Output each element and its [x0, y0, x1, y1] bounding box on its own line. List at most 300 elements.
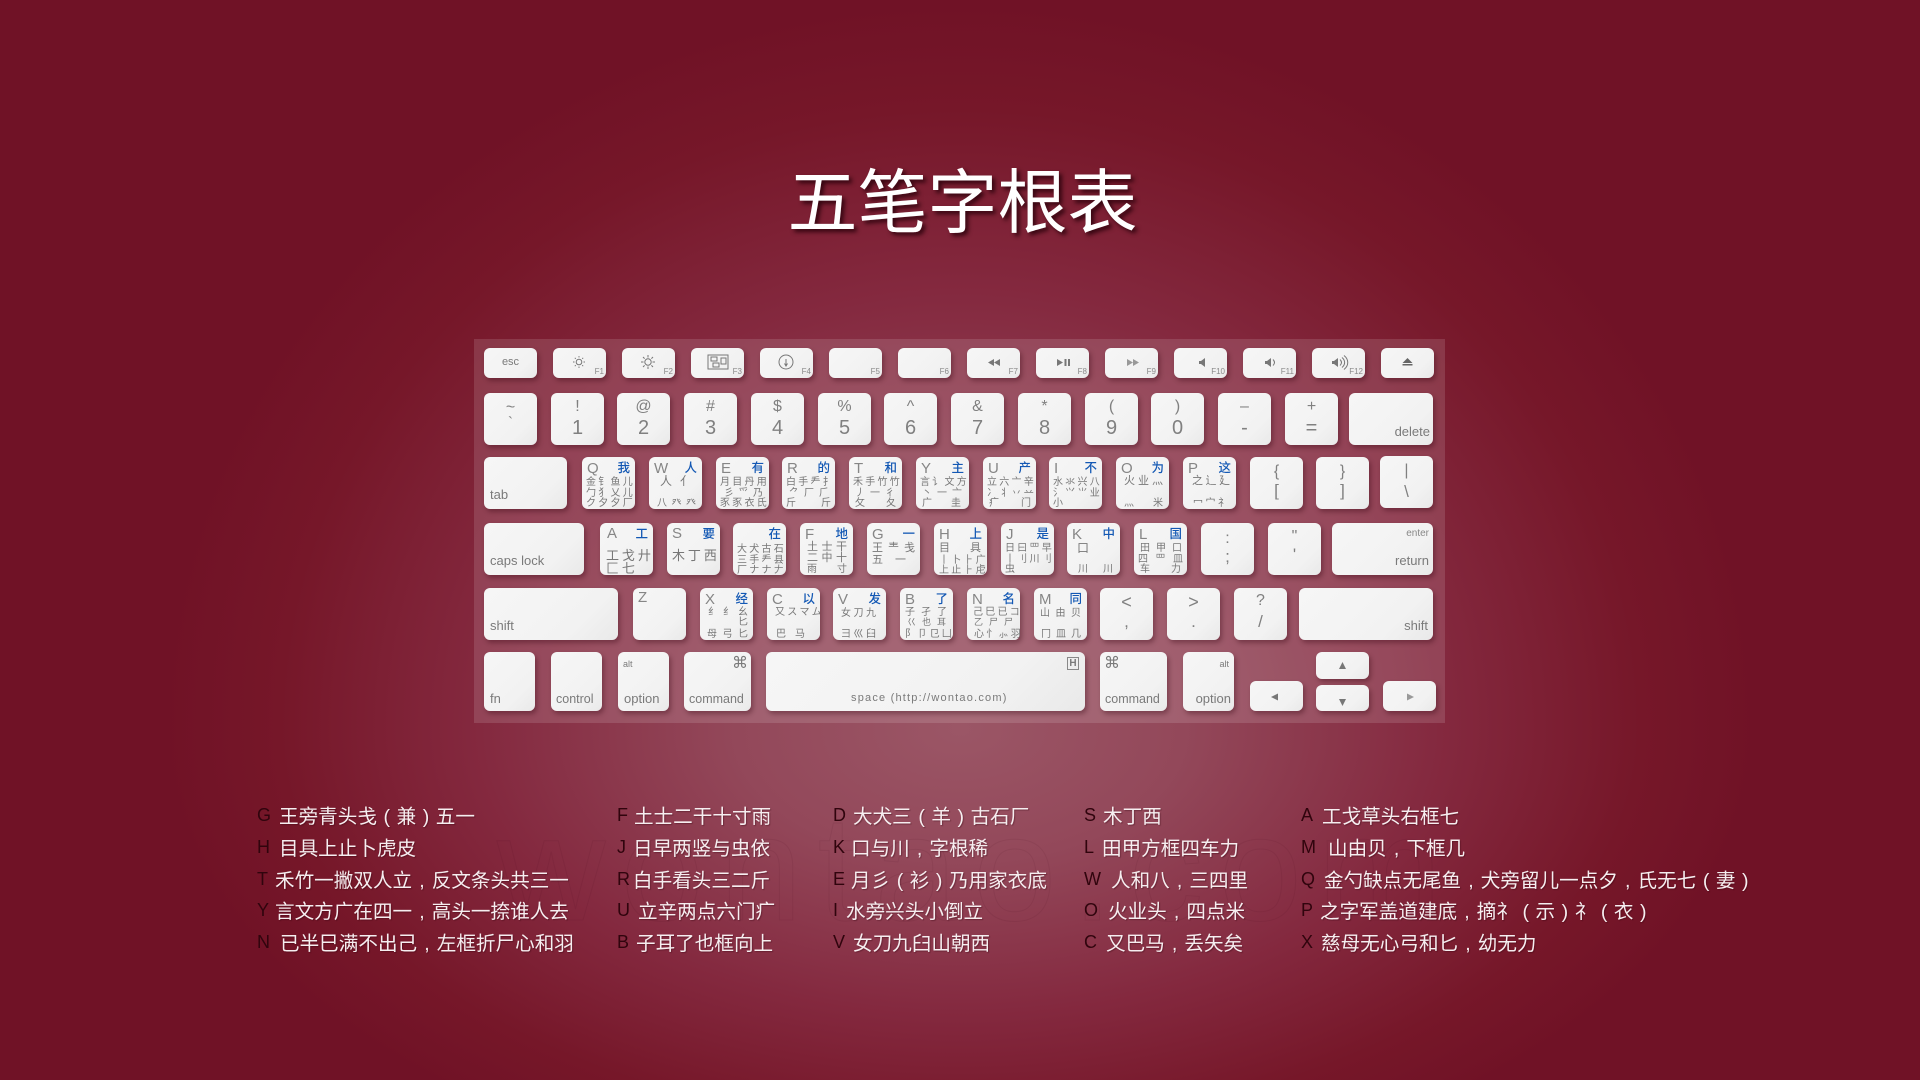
- key: space: H: [1069, 658, 1077, 669]
- key: 5: 5: [839, 417, 850, 439]
- legend text: S: 木丁西: [1103, 800, 1162, 829]
- key: comma: ,: [1124, 612, 1129, 631]
- key: F11 volume down: F11: [1281, 367, 1294, 376]
- key: W 人: 人 亻: [660, 472, 692, 489]
- key: H 上: [934, 523, 987, 575]
- key: F2 brightness up: F2: [664, 367, 673, 376]
- key: equals: +: [1307, 398, 1316, 415]
- key: J 是: 丨 刂 川 刂: [1005, 550, 1052, 565]
- key: V 发: 彐 巛 臼: [841, 625, 876, 640]
- key: O 为: 火 业 灬: [1124, 472, 1163, 488]
- key: 9: 9: [1106, 417, 1117, 439]
- legend letter: L: L: [1084, 837, 1094, 857]
- key: 3: [684, 393, 737, 445]
- key: N 名: 名: [1002, 588, 1015, 607]
- key: B 了: 阝 卩 ⺋ 凵: [905, 625, 952, 640]
- key: F9 forward: F9: [1147, 367, 1156, 376]
- key: T 和: T: [854, 460, 863, 477]
- key: U 产: [983, 457, 1036, 509]
- key: F8 play pause: [1036, 348, 1089, 378]
- legend text: Q: (: [1703, 870, 1709, 892]
- panel: keyboard: [474, 339, 1445, 723]
- key: period: .: [1191, 612, 1196, 631]
- key: F 地: [800, 523, 853, 575]
- key: L 国: 车 力: [1140, 560, 1181, 575]
- key: left command: ⌘: [732, 653, 748, 672]
- key: I 不: 水 氺 兴 八: [1053, 473, 1100, 488]
- legend letter: P: P: [1301, 900, 1313, 920]
- key: Y 主: Y: [921, 460, 931, 477]
- key: D 在: [733, 523, 786, 575]
- key: tab: tab: [490, 487, 508, 502]
- key: right shift: shift: [1404, 618, 1428, 633]
- key: O 为: 灬 米: [1124, 494, 1163, 509]
- key: 7: &: [972, 398, 983, 415]
- key: R 的: 的: [817, 457, 830, 476]
- legend text: O: 火业头 四点米: [1108, 895, 1245, 924]
- key: minus: –: [1240, 398, 1249, 415]
- key: N 名: 心 忄 ⺗ 羽: [974, 625, 1020, 640]
- key: R 的: 斤 斤: [786, 494, 831, 509]
- key: semicolon: [1201, 523, 1254, 575]
- key: U 产: 冫 丬 丷 䒑: [987, 484, 1034, 499]
- legend text: U: 立辛两点六门疒: [638, 895, 775, 924]
- key: F 地: 二 中 十: [807, 549, 847, 565]
- key: semicolon: ;: [1225, 547, 1230, 566]
- key: arrow down: [1316, 685, 1369, 711]
- legend letter: M: M: [1301, 837, 1316, 857]
- legend text: C: 又巴马 丢矢矣: [1106, 927, 1243, 956]
- key: E 有: 月 目 丹 用: [720, 473, 767, 488]
- key: K 中: 川 川: [1078, 560, 1113, 575]
- key: delete: [1349, 393, 1433, 445]
- legend text: H: 目具上止卜虎皮: [279, 832, 416, 861]
- legend text: K: ,: [917, 838, 922, 860]
- legend text: P: (: [1601, 901, 1607, 923]
- key: K 中: [1067, 523, 1120, 575]
- key: U 产: 产: [1018, 457, 1031, 476]
- key: M 同: 冂 皿 几: [1041, 625, 1081, 640]
- key: I 不: 小: [1053, 494, 1063, 509]
- key: V 发: [833, 588, 886, 640]
- key: I 不: 氵 ⺍ ⺌ 业: [1053, 484, 1100, 499]
- legend letter: F: F: [617, 805, 628, 825]
- key: V 发: 发: [868, 588, 881, 607]
- legend letter: H: H: [257, 837, 270, 857]
- key: tilde: ~: [506, 399, 515, 416]
- legend text: W: ,: [1177, 870, 1182, 892]
- key: F11 volume down: [1243, 348, 1296, 378]
- key: 0: 0: [1172, 417, 1183, 439]
- legend text: Q: 金勺缺点无尾鱼 犬旁留儿一点夕 氏无七 妻: [1324, 864, 1735, 893]
- legend text: N: ,: [424, 933, 430, 955]
- key: O 为: O: [1121, 460, 1133, 477]
- key: W 人: W: [654, 460, 668, 477]
- key: B 了: 子 孑 了: [905, 603, 947, 618]
- legend text: O: ,: [1174, 901, 1179, 923]
- key: F4 dashboard: F4: [802, 367, 811, 376]
- key: Z: [633, 588, 686, 640]
- key: Q 我: 我: [617, 457, 630, 476]
- key: F7 rewind: F7: [1009, 367, 1018, 376]
- key: arrow right: [1383, 681, 1436, 711]
- legend letter: X: X: [1301, 932, 1313, 952]
- key: slash: [1234, 588, 1287, 640]
- key: left option: alt: [623, 659, 633, 669]
- key: L 国: 田 甲 口: [1140, 539, 1182, 554]
- key: left option: [618, 652, 669, 711]
- key: R 的: 白 手 龵 扌: [786, 473, 833, 488]
- key: 5: [818, 393, 871, 445]
- key: right command: command: [1105, 692, 1160, 706]
- legend text: W: 人和八 三四里: [1111, 864, 1248, 893]
- legend text: P: 之字军盖道建底 摘礻 示 礻 衣: [1320, 895, 1634, 924]
- key: U 产: 疒 门: [989, 494, 1031, 509]
- legend letter: C: C: [1084, 932, 1097, 952]
- key: B 了: B: [905, 591, 915, 608]
- key: H 上: 目 具: [939, 539, 981, 555]
- legend text: D: 大犬三 羊 古石厂: [853, 800, 1029, 829]
- key: A 工: [600, 523, 653, 575]
- key: X 经: 匕: [738, 613, 748, 628]
- key: N 名: N: [972, 591, 983, 608]
- key: Y 主: 丶 一 亠: [922, 484, 962, 499]
- legend letter: Y: Y: [257, 900, 269, 920]
- legend letter: D: D: [833, 805, 846, 825]
- key: F5: F5: [871, 367, 880, 376]
- legend letter: Q: Q: [1301, 869, 1315, 889]
- key: backslash: \: [1404, 482, 1409, 501]
- key: 1: [551, 393, 604, 445]
- key: left shift: shift: [490, 618, 514, 633]
- legend text: R: 白手看头三二斤: [633, 864, 770, 893]
- key: I 不: I: [1054, 460, 1058, 477]
- key: esc: [484, 348, 537, 378]
- key: P 这: P: [1188, 460, 1198, 477]
- legend text: E: (: [897, 870, 903, 892]
- key: return: [1332, 523, 1433, 575]
- key: W 人: 人: [684, 457, 697, 476]
- key: fn: [484, 652, 535, 711]
- key: period: [1167, 588, 1220, 640]
- key: A 工: 工: [635, 523, 648, 542]
- key: 8: *: [1041, 398, 1048, 415]
- key: delete: delete: [1395, 424, 1430, 439]
- legend text: Y: 言文方广在四一 高头一捺谁人去: [275, 895, 569, 924]
- key: slash: ?: [1256, 592, 1265, 609]
- legend text: F: 土士二干十寸雨: [634, 800, 771, 829]
- legend text: P: ): [1640, 901, 1647, 923]
- key: F9 forward: [1105, 348, 1158, 378]
- legend text: Q: ): [1742, 870, 1749, 892]
- key: E 有: 彡 爫 乃: [724, 484, 763, 499]
- key: quote: ': [1293, 545, 1296, 564]
- legend letter: U: U: [617, 900, 630, 920]
- key: R 的: [782, 457, 835, 509]
- key: Y 主: 言 讠 文 方: [920, 473, 967, 488]
- key: F 地: 土 士 干: [807, 538, 847, 554]
- key: A 工: A: [607, 525, 617, 542]
- key: G 一: G: [872, 526, 884, 543]
- legend letter: N: N: [257, 932, 270, 952]
- key: minus: -: [1241, 417, 1248, 439]
- key: X 经: [700, 588, 753, 640]
- key: comma: <: [1121, 592, 1132, 612]
- key: eject: [1381, 348, 1434, 378]
- key: 5: %: [837, 398, 852, 415]
- key: L 国: [1134, 523, 1187, 575]
- key: B 了: 了: [935, 588, 948, 607]
- legend text: C: ,: [1172, 933, 1177, 955]
- key: arrow left: [1250, 681, 1303, 711]
- key: R 的: R: [787, 460, 798, 477]
- key: return: enter: [1406, 528, 1429, 539]
- key: right command: [1100, 652, 1167, 711]
- key: K 中: K: [1072, 526, 1082, 543]
- key: equals: =: [1306, 417, 1317, 439]
- key: W 人: 八 癶 癶: [657, 494, 696, 509]
- key: D 在: 大 犬 古 石: [737, 540, 784, 555]
- key: control: control: [556, 692, 594, 706]
- key: 3: 3: [705, 417, 716, 439]
- legend text: B: 子耳了也框向上: [636, 927, 773, 956]
- key: 7: [951, 393, 1004, 445]
- legend letter: S: S: [1084, 805, 1096, 825]
- legend letter: V: V: [833, 932, 845, 952]
- key: D 在: 在: [768, 523, 781, 542]
- key: Y 主: [916, 457, 969, 509]
- key: G 一: [867, 523, 920, 575]
- key: J 是: 虫: [1005, 560, 1015, 575]
- key: I 不: [1049, 457, 1102, 509]
- key: 1: !: [575, 398, 580, 415]
- key: space: space (http://wontao.com): [851, 692, 1008, 704]
- legend letter: R: R: [617, 869, 630, 889]
- key: right brace: [1316, 457, 1369, 509]
- key: 9: (: [1109, 398, 1114, 415]
- legend text: P: ,: [1464, 901, 1470, 923]
- legend letter: G: G: [257, 805, 271, 825]
- key: E 有: E: [721, 460, 731, 477]
- legend text: V: 女刀九臼山朝西: [853, 927, 990, 956]
- legend text: P: (: [1522, 901, 1529, 923]
- key: J 是: 是: [1036, 523, 1049, 542]
- key: arrow up: [1316, 652, 1369, 679]
- key: F 地: 雨 寸: [807, 560, 847, 575]
- key: H 上: 上: [969, 523, 982, 542]
- key: caps lock: caps lock: [490, 553, 544, 568]
- key: F1 brightness down: [553, 348, 606, 378]
- key: caps lock: [484, 523, 584, 575]
- key: F 地: F: [805, 526, 814, 543]
- key: L 国: L: [1139, 526, 1147, 543]
- key: G 一: 五 一: [872, 551, 906, 567]
- key: A 工: 工 戈 廾: [606, 545, 651, 564]
- key: right brace: }: [1340, 463, 1345, 480]
- legend text: E: 月彡 衫 乃用家衣底: [851, 864, 1047, 893]
- key: N 名: 己 巳 已 コ: [973, 603, 1020, 618]
- key: U 产: 立 六 亠 辛: [987, 473, 1034, 488]
- key: R 的: ⺈ 厂 ⺁: [789, 484, 829, 499]
- key: H 上: 丨 卜 ⺊ 广: [939, 551, 986, 566]
- key: Q 我: 勹 犭 乂 儿: [586, 484, 633, 499]
- legend letter: E: E: [833, 869, 845, 889]
- key: 0: ): [1175, 398, 1180, 415]
- key: T 和: 丿 一 彳: [855, 484, 895, 499]
- legend text: I: 水旁兴头小倒立: [846, 895, 983, 924]
- key: equals: [1285, 393, 1338, 445]
- key: right brace: ]: [1340, 481, 1345, 500]
- key: O 为: 为: [1151, 457, 1164, 476]
- legend text: X: 慈母无心弓和匕 幼无力: [1321, 927, 1537, 956]
- key: 9: [1085, 393, 1138, 445]
- key: F 地: 地: [835, 523, 848, 542]
- key: tilde: [484, 393, 537, 445]
- key: F10 mute: [1174, 348, 1227, 378]
- key: Q 我: [582, 457, 635, 509]
- key: tilde: `: [508, 414, 513, 431]
- key: P 这: [1183, 457, 1236, 509]
- key: S 要: S: [672, 525, 682, 542]
- key: right option: alt: [1219, 659, 1229, 669]
- key: slash: /: [1258, 612, 1263, 631]
- key: 2: [617, 393, 670, 445]
- key: U 产: U: [988, 460, 999, 477]
- key: quote: [1268, 523, 1321, 575]
- legend letter: J: J: [617, 837, 626, 857]
- key: F12 volume up: F12: [1349, 367, 1363, 376]
- legend text: D: (: [918, 806, 925, 828]
- legend text: Q: ,: [1468, 870, 1474, 892]
- key: H 上: H: [939, 526, 950, 543]
- key: C 以: 巴 马: [776, 625, 805, 640]
- key: V 发: V: [838, 591, 848, 608]
- key: Q 我: ク 夕 夕 厂: [586, 494, 633, 509]
- legend text: Y: ,: [419, 901, 425, 923]
- key: X 经: 纟 纟 幺: [708, 603, 748, 618]
- legend letter: O: O: [1084, 900, 1098, 920]
- legend text: A: 工戈草头右框七: [1322, 800, 1459, 829]
- key: esc: esc: [502, 356, 519, 368]
- key: X 经: 经: [735, 588, 748, 607]
- key: T 和: 禾 手 竹 竹: [853, 473, 900, 488]
- key: S 要: 要: [702, 523, 715, 542]
- key: left option: option: [624, 691, 659, 706]
- legend text: G: ): [423, 806, 429, 828]
- key: C 以: [767, 588, 820, 640]
- title: 五笔字根表: [788, 147, 1138, 248]
- key: F5: [829, 348, 882, 378]
- key: F3 expose: [691, 348, 744, 378]
- key: F6: F6: [940, 367, 949, 376]
- key: M 同: [1034, 588, 1087, 640]
- legend text: G: 王旁青头戋 兼 五一: [279, 800, 475, 829]
- key: 2: @: [635, 398, 652, 415]
- key: F1 brightness down: F1: [595, 367, 604, 376]
- key: T 和: 和: [884, 457, 897, 476]
- key: J 是: [1001, 523, 1054, 575]
- key: E 有: [716, 457, 769, 509]
- key: M 同: 同: [1069, 588, 1082, 607]
- legend text: D: ): [958, 806, 964, 828]
- key: K 中: 中: [1102, 523, 1115, 542]
- legend text: P: ): [1562, 901, 1568, 923]
- key: 4: $: [773, 398, 782, 415]
- key: left brace: {: [1274, 463, 1279, 480]
- key: J 是: 日 曰 罒 早: [1005, 539, 1052, 554]
- legend text: N: 已半巳满不出己 左框折尸心和羽: [280, 927, 574, 956]
- key: E 有: 豕 豕 衣 氏: [720, 494, 767, 509]
- key: F10 mute: F10: [1211, 367, 1225, 376]
- key: right option: option: [1196, 691, 1231, 706]
- key: space: [766, 652, 1085, 711]
- key: G 一: 一: [902, 523, 915, 542]
- key: P 这: 冖 宀 礻: [1193, 494, 1228, 509]
- legend letter: I: I: [833, 900, 838, 920]
- key: T 和: 攵 夂: [855, 494, 896, 509]
- key: 3: #: [706, 398, 715, 415]
- key: fn: fn: [490, 691, 501, 706]
- key: F3 expose: F3: [733, 367, 742, 376]
- key: 4: [751, 393, 804, 445]
- legend text: G: (: [384, 806, 390, 828]
- key: Z: Z: [638, 589, 647, 606]
- key: F8 play pause: F8: [1078, 367, 1087, 376]
- legend text: E: ): [936, 870, 942, 892]
- legend letter: A: A: [1301, 805, 1313, 825]
- legend letter: T: T: [257, 869, 268, 889]
- key: E 有: 有: [751, 457, 764, 476]
- key: semicolon: :: [1225, 530, 1230, 547]
- legend text: Q: ,: [1625, 870, 1630, 892]
- key: F7 rewind: [967, 348, 1020, 378]
- key: X 经: 母 弓 匕: [707, 625, 748, 640]
- key: 1: 1: [572, 417, 583, 439]
- key: C 以: 以: [802, 588, 815, 607]
- key: left brace: [1250, 457, 1303, 509]
- key: 6: 6: [905, 417, 916, 439]
- key: V 发: 女 刀 九: [841, 604, 876, 619]
- key: G 一: 王 龶 戋: [872, 539, 915, 555]
- key: L 国: 国: [1169, 523, 1182, 542]
- key: O 为: [1116, 457, 1169, 509]
- key: M 同: M: [1039, 591, 1052, 608]
- key: 0: [1151, 393, 1204, 445]
- key: F2 brightness up: [622, 348, 675, 378]
- key: N 名: 乙 尸 尸: [974, 615, 1013, 628]
- key: I 不: 不: [1084, 457, 1097, 476]
- key: B 了: 巜 也 耳: [907, 615, 946, 628]
- legend text: J: 日早两竖与虫依: [633, 832, 770, 861]
- key: 7: 7: [972, 417, 983, 439]
- key: return: return: [1395, 553, 1429, 568]
- legend text: M: 山由贝 下框几: [1328, 832, 1465, 861]
- key: Y 主: 主: [951, 457, 964, 476]
- key: T 和: [849, 457, 902, 509]
- key: K 中: 口: [1077, 539, 1089, 556]
- key: 4: 4: [772, 417, 783, 439]
- legend letter: K: K: [833, 837, 845, 857]
- watermark: wontao.com: wontao.com: [496, 784, 1442, 952]
- legend text: T: 禾竹一撇双人立 反文条头共三一: [275, 864, 569, 893]
- key: X 经: X: [705, 591, 715, 608]
- key: right shift: [1299, 588, 1433, 640]
- key: Q 我: Q: [587, 460, 599, 477]
- key: right command: ⌘: [1104, 653, 1120, 672]
- key: left command: command: [689, 692, 744, 706]
- key: P 这: 这: [1218, 457, 1231, 476]
- key: comma: [1100, 588, 1153, 640]
